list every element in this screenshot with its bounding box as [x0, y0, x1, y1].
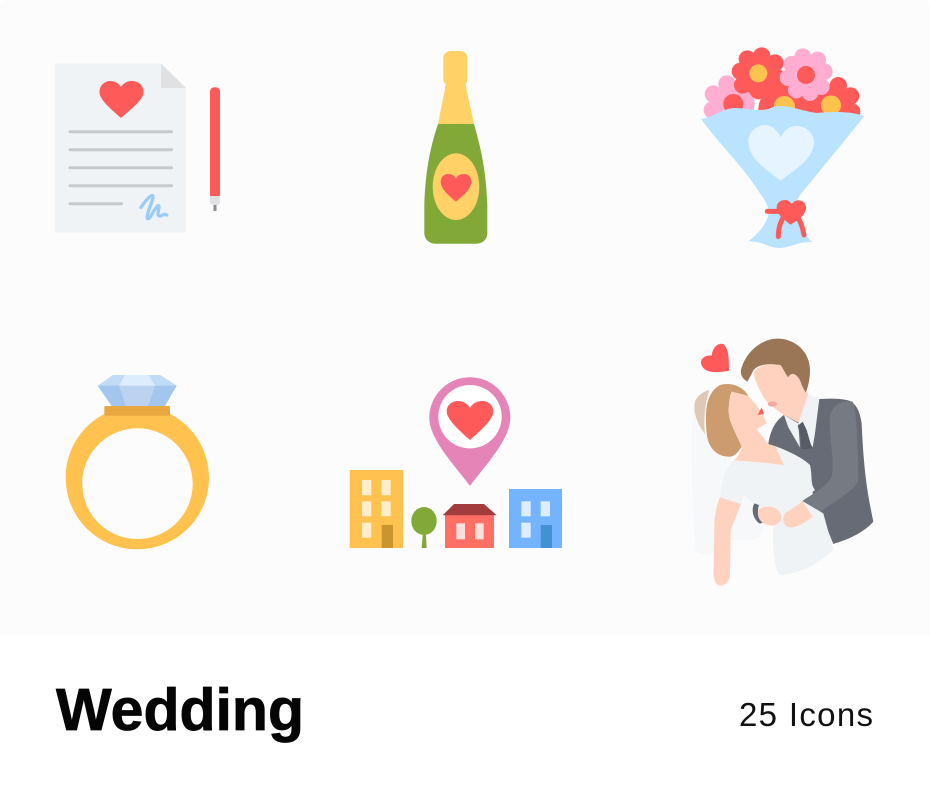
heart on label	[441, 174, 471, 202]
groom shirt collar	[784, 394, 819, 447]
title: Wedding	[56, 677, 304, 743]
bride hand	[758, 507, 782, 525]
ring setting	[104, 406, 170, 416]
groom cuff	[753, 503, 763, 524]
signature	[141, 196, 167, 219]
flower: top red	[732, 47, 787, 99]
pen	[210, 87, 220, 211]
bride arm	[713, 497, 741, 586]
icon: wedding venue map	[350, 377, 562, 548]
folded corner	[161, 64, 186, 88]
groom lips	[768, 401, 777, 407]
icon: kissing bride and groom	[692, 339, 873, 586]
groom jacket	[768, 399, 873, 544]
heart on wrapping paper	[748, 125, 814, 181]
diamond	[98, 375, 177, 406]
bridal veil	[692, 388, 763, 555]
icon count: 25 Icons	[739, 696, 873, 733]
groom tie	[798, 422, 812, 449]
groom sleeve	[802, 401, 858, 517]
icon: marriage certificate and pen	[55, 64, 220, 232]
bouquet wrapping paper	[701, 106, 864, 248]
veil shaded top	[694, 390, 709, 434]
bottle foil	[438, 51, 474, 124]
certificate text lines	[70, 132, 172, 204]
location pin	[429, 377, 510, 486]
flower: left pink	[704, 75, 755, 125]
bride lips	[758, 407, 764, 415]
bottle label	[433, 153, 479, 220]
bottle body	[424, 124, 487, 244]
house	[443, 504, 497, 548]
flower: top pink	[780, 48, 833, 101]
building: blue	[509, 489, 562, 548]
icon: diamond ring	[66, 375, 209, 549]
icon: flower bouquet	[701, 47, 864, 248]
groom hand	[783, 501, 813, 527]
bride hair	[706, 384, 748, 457]
heart on certificate	[100, 81, 144, 118]
ribbon heart knot	[767, 200, 806, 237]
bride face and neck	[728, 392, 784, 465]
tree	[411, 507, 437, 548]
icon: champagne bottle	[424, 51, 487, 244]
groom hair	[741, 339, 810, 393]
ring band	[66, 406, 209, 549]
flower: lower red with yellow centre	[758, 77, 860, 136]
bride dress	[720, 446, 833, 575]
groom neck and face	[754, 364, 808, 423]
certificate sheet	[55, 64, 186, 232]
floating heart	[701, 344, 729, 372]
building: yellow	[350, 470, 403, 548]
